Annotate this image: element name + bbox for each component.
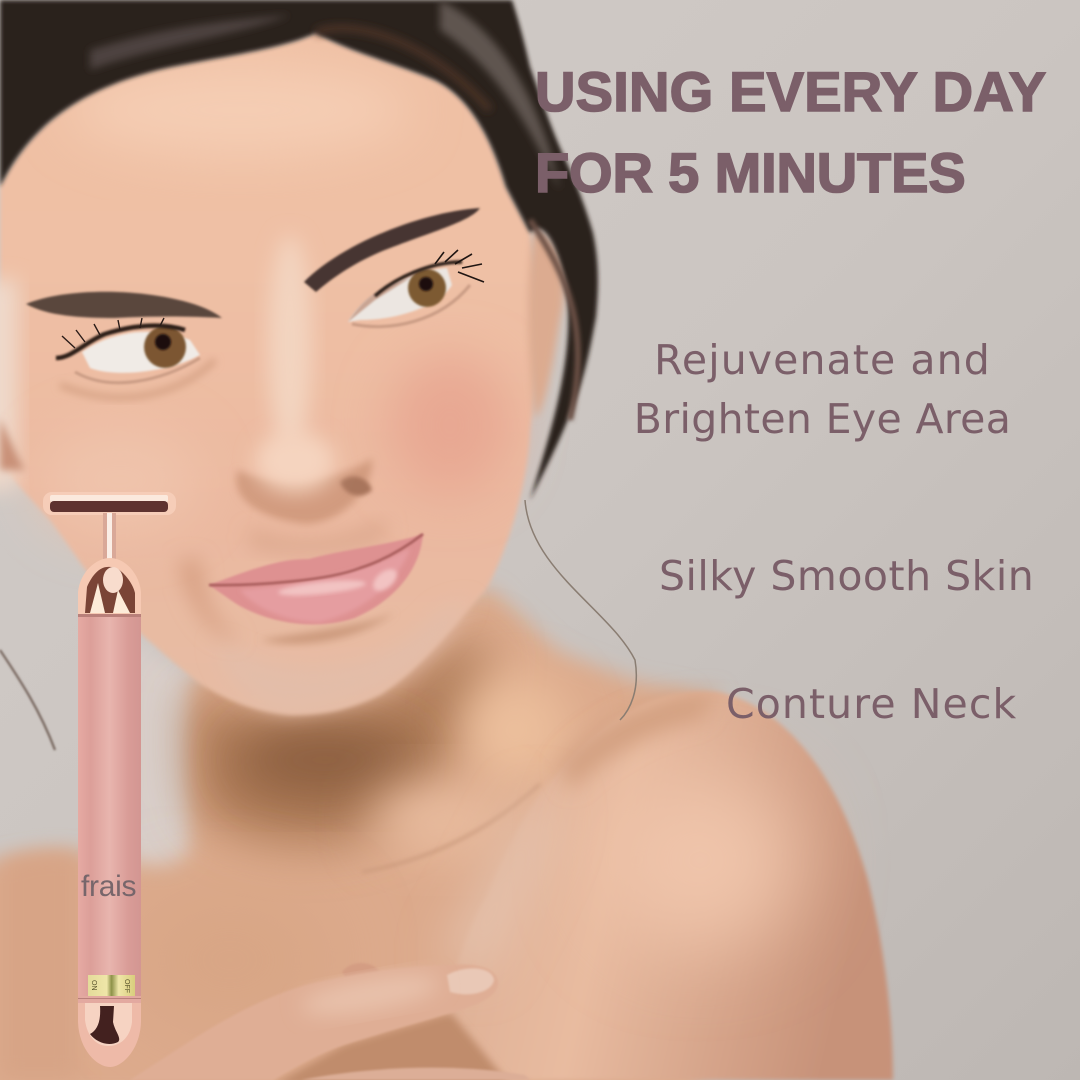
handle	[78, 614, 141, 976]
chrome cap	[78, 558, 141, 614]
left shoulder shade	[0, 851, 78, 1080]
heading line two: FOR 5 MINUTES	[535, 141, 966, 204]
base tip	[78, 996, 141, 1067]
benefit: eye area	[634, 336, 1011, 443]
ear	[528, 232, 564, 418]
hand	[130, 963, 530, 1080]
right eye	[348, 250, 484, 327]
gold switch: OFF	[123, 979, 130, 993]
left eye	[56, 318, 215, 397]
heading: USING EVERY DAY	[535, 60, 1046, 123]
benefit: smooth skin: Silky Smooth Skin	[659, 552, 1034, 600]
stem	[103, 513, 116, 559]
hair	[0, 0, 598, 500]
benefit: eye area: Brighten Eye Area	[634, 395, 1011, 443]
face	[0, 33, 536, 715]
brand text: frais	[81, 870, 136, 903]
nose	[236, 432, 385, 552]
benefit: eye area: Rejuvenate and	[654, 336, 991, 384]
hair strands	[0, 500, 636, 750]
gold switch: ON	[90, 980, 97, 990]
benefit: neck: Conture Neck	[726, 680, 1017, 728]
pale haze beside neck	[130, 640, 215, 880]
eyebrows	[26, 292, 222, 318]
gold switch	[78, 975, 141, 996]
T-bar head	[43, 492, 176, 515]
lips	[209, 534, 423, 624]
shoulder	[440, 691, 893, 1080]
neck and chest	[0, 588, 700, 1080]
neck shadow	[130, 640, 570, 1030]
